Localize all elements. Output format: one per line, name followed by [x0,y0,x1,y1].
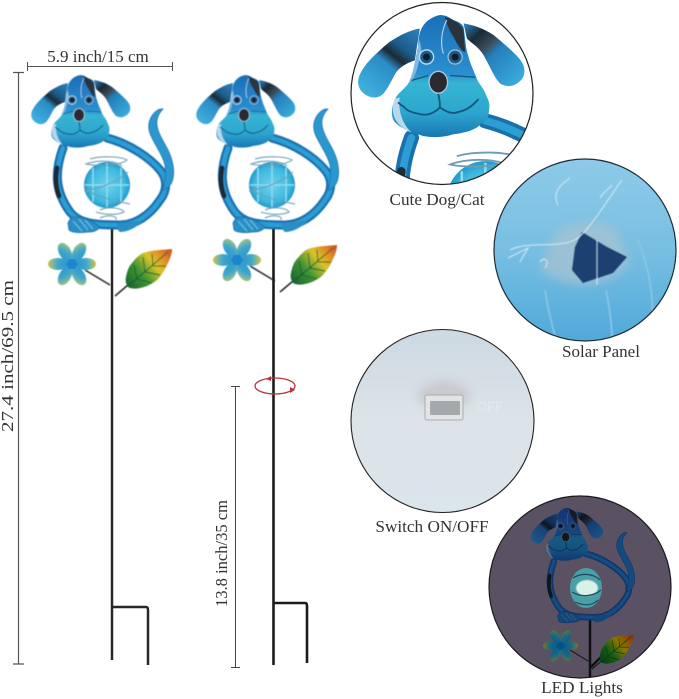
icon: red rotate arrow [255,376,295,394]
dog figure [196,75,339,233]
panel: switch detail circle [351,330,534,512]
stake pole and fork [112,225,148,665]
width dimension: 5.9 inch/15 cm [27,47,172,71]
lit glass ball [570,568,602,608]
label: Solar Panel: Solar Panel [562,342,640,361]
stake product: right stake with split [196,75,339,665]
lower section dimension: 13.8 inch/35 cm [212,386,240,668]
panel: solar panel detail circle [494,159,676,341]
width dimension: 5.9 inch/15 cm: 5.9 inch/15 cm [47,47,149,66]
label: LED Lights: LED Lights [541,678,623,697]
lower section dimension: 13.8 inch/35 cm: 13.8 inch/35 cm [212,500,231,607]
label: Switch ON/OFF: Switch ON/OFF [375,517,489,536]
solar cell [572,232,627,283]
switch [425,395,463,420]
label: Cute Dog/Cat: Cute Dog/Cat [389,190,485,209]
panel: LED lights detail circle [489,496,671,680]
flower and leaf [48,240,172,296]
glass ball [249,157,295,220]
stake pole and fork [273,226,307,665]
faint OFF mark: OFF [477,399,503,414]
flower and leaf [213,236,337,292]
dog figure [31,75,174,233]
glass ball [84,157,130,220]
stake product: left full stake [31,75,174,665]
height dimension: 27.4 inch/69.5 cm [0,72,24,664]
panel: cute dog detail circle [350,2,534,186]
